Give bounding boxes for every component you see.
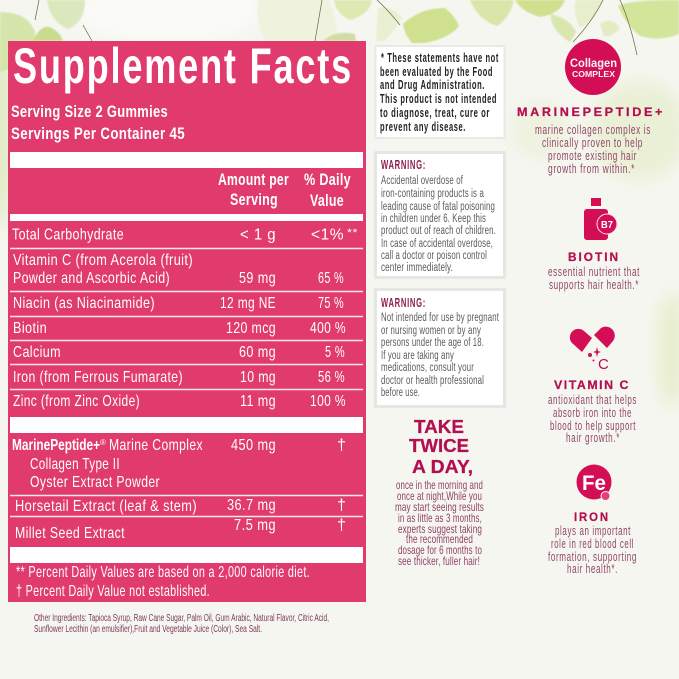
row: total carbohydrate: ** xyxy=(347,227,358,239)
column headers: Amount per xyxy=(218,171,289,189)
row: calcium xyxy=(13,344,345,361)
other ingredients: Other Ingredients: Tapioca Syrup, Raw Cane Sugar, Palm Oil, Gum Arabic, Natural Flavor, Citric Acid, xyxy=(34,613,329,624)
row: zinc xyxy=(13,393,346,410)
row: vitamin c: 59 mg xyxy=(239,270,276,287)
benefit: iron: plays an important xyxy=(555,523,631,538)
row: iron: 10 mg xyxy=(240,369,276,386)
benefit: vitamin c: VITAMIN C xyxy=(554,378,630,392)
icon: collagen complex badge xyxy=(565,39,621,95)
icon: collagen complex badge: Collagen xyxy=(570,58,617,70)
panel: supplement facts xyxy=(8,38,366,602)
heading: take twice a day: TWICE xyxy=(409,436,469,456)
row: calcium: 5 % xyxy=(325,344,345,361)
footnotes: † Percent Daily Value not established. xyxy=(16,583,210,600)
panel: warning overdose: leading cause of fatal poisoning xyxy=(381,201,495,213)
panel: warning pregnancy: or nursing women or by any xyxy=(381,325,481,337)
text: dosage advice: may start seeing results xyxy=(395,500,484,514)
row: total carbohydrate: <1% xyxy=(311,226,344,244)
serving info: Serving Size 2 Gummies xyxy=(11,103,168,121)
panel: warning pregnancy: persons under the age of 18. xyxy=(381,337,484,349)
panel: fda disclaimer: prevent any disease. xyxy=(380,120,466,134)
row: niacin: 12 mg NE xyxy=(220,295,276,312)
serving info: Servings Per Container 45 xyxy=(11,125,185,143)
icon: iron xyxy=(576,464,612,500)
panel: fda disclaimer: to diagnose, treat, cure or xyxy=(380,106,490,120)
benefit: marinepeptide: growth from within.* xyxy=(548,161,635,176)
text: dosage advice: see thicker, fuller hair! xyxy=(398,554,480,568)
row: marinepeptide: † xyxy=(337,437,346,454)
text: dosage advice: the recommended xyxy=(406,532,473,546)
row: iron: 56 % xyxy=(318,369,345,386)
text: dosage advice: in as little as 3 months, xyxy=(398,511,482,525)
panel: warning overdose: call a doctor or poison control xyxy=(381,250,487,262)
row: niacin xyxy=(13,295,344,312)
panel: warning overdose: iron-containing products is a xyxy=(381,188,484,200)
row: calcium: Calcium xyxy=(13,344,61,361)
panel: warning pregnancy: If you are taking any xyxy=(381,350,454,362)
benefit: marinepeptide: MARINEPEPTIDE+ xyxy=(517,105,665,119)
row: vitamin c: Vitamin C (from Acerola (fruit) xyxy=(13,252,193,269)
column headers: Value xyxy=(310,192,344,210)
panel: fda disclaimer: been evaluated by the Food xyxy=(380,65,493,79)
panel: warning overdose: WARNING: xyxy=(381,157,426,172)
text: dosage advice: experts suggest taking xyxy=(398,522,482,536)
row: horsetail: † xyxy=(337,497,346,514)
panel: fda disclaimer: This product is not intended xyxy=(380,92,497,106)
row: horsetail xyxy=(15,497,346,515)
icon: biotin bottle: B7 xyxy=(601,220,613,231)
benefit: biotin: BIOTIN xyxy=(568,250,620,264)
row: vitamin c: Powder and Ascorbic Acid) xyxy=(13,270,170,287)
row: horsetail: Horsetail Extract (leaf & stem) xyxy=(15,498,197,515)
title: Supplement Facts xyxy=(13,38,353,94)
row: total carbohydrate xyxy=(12,226,358,244)
row: niacin: Niacin (as Niacinamide) xyxy=(13,295,155,312)
panel: fda disclaimer xyxy=(376,46,504,138)
row: biotin: 400 % xyxy=(310,320,346,337)
benefit: biotin xyxy=(548,250,640,292)
row: millet xyxy=(15,517,346,542)
heading: take twice a day: TAKE xyxy=(414,417,464,437)
row: vitamin c: 65 % xyxy=(318,270,344,287)
panel: warning pregnancy: Not intended for use by pregnant xyxy=(381,312,499,324)
panel: warning pregnancy xyxy=(376,290,504,406)
row: iron xyxy=(13,369,345,386)
icon: vitamin c capsule: C xyxy=(598,356,609,373)
row: biotin xyxy=(13,320,346,337)
benefit: vitamin c xyxy=(548,378,637,445)
row: total carbohydrate: Total Carbohydrate xyxy=(12,226,124,244)
icon: collagen complex badge: COMPLEX xyxy=(572,69,615,79)
panel: warning overdose: In case of accidental overdose, xyxy=(381,238,493,250)
text: dosage advice: once in the morning and xyxy=(396,478,483,492)
benefit: marinepeptide xyxy=(517,105,665,176)
benefit: vitamin c: hair growth.* xyxy=(566,430,620,445)
column headers xyxy=(218,171,351,210)
row: vitamin c xyxy=(13,252,344,287)
row: marinepeptide: ® xyxy=(100,438,106,447)
row: biotin: Biotin xyxy=(13,320,47,337)
text: dosage advice xyxy=(395,478,484,568)
row: horsetail: 36.7 mg xyxy=(227,497,276,514)
heading: take twice a day: A DAY, xyxy=(412,457,473,477)
row: millet: † xyxy=(337,517,346,534)
icon: iron: Fe xyxy=(582,472,606,495)
row: biotin: 120 mcg xyxy=(226,320,276,337)
panel: warning overdose: in children under 6. Keep this xyxy=(381,213,486,225)
row: marinepeptide: Marine Complex xyxy=(109,437,203,454)
footnotes: ** Percent Daily Values are based on a 2,000 calorie diet. xyxy=(16,564,310,581)
row: niacin: 75 % xyxy=(318,295,344,312)
text: dosage advice: once at night,While you xyxy=(397,489,482,503)
row: marinepeptide: MarinePeptide+ xyxy=(12,437,100,454)
other ingredients xyxy=(34,613,329,635)
serving info xyxy=(11,103,185,143)
row: millet: Millet Seed Extract xyxy=(15,525,125,542)
row: zinc: Zinc (from Zinc Oxide) xyxy=(13,393,140,410)
panel: warning pregnancy: doctor or health professional xyxy=(381,375,484,387)
text: dosage advice: dosage for 6 months to xyxy=(398,543,482,557)
other ingredients: Sunflower Lecithin (an emulsifier),Fruit and Vegetable Juice (Color), Sea Salt. xyxy=(34,624,262,635)
row: zinc: 100 % xyxy=(310,393,346,410)
column headers: % Daily xyxy=(304,171,351,189)
panel: warning pregnancy: before use. xyxy=(381,387,420,399)
panel: fda disclaimer: and Drug Administration. xyxy=(380,78,485,92)
row: iron: Iron (from Ferrous Fumarate) xyxy=(13,369,183,386)
row: marinepeptide: 450 mg xyxy=(231,437,276,454)
panel: warning overdose xyxy=(376,152,504,278)
row: calcium: 60 mg xyxy=(239,344,276,361)
panel: fda disclaimer: * These statements have not xyxy=(381,51,499,65)
row: marinepeptide: Collagen Type II xyxy=(30,456,120,473)
row: millet: 7.5 mg xyxy=(234,517,276,534)
benefit: iron: hair health*. xyxy=(567,561,618,576)
panel: warning overdose: center immediately. xyxy=(381,262,453,274)
icon: biotin bottle xyxy=(584,198,617,240)
benefit: iron xyxy=(548,510,637,576)
benefit: iron: IRON xyxy=(574,510,610,524)
row: zinc: 11 mg xyxy=(240,393,276,410)
panel: warning pregnancy: medications, consult your xyxy=(381,362,474,374)
panel: warning pregnancy: WARNING: xyxy=(381,295,426,310)
row: total carbohydrate: < 1 g xyxy=(240,226,276,244)
row: marinepeptide: Oyster Extract Powder xyxy=(30,474,160,491)
panel: warning overdose: product out of reach of children. xyxy=(381,225,496,237)
footnotes xyxy=(16,564,310,600)
panel: warning overdose: Accidental overdose of xyxy=(381,175,463,187)
row: marinepeptide xyxy=(12,437,346,491)
icon: vitamin c capsule xyxy=(570,327,615,373)
column headers: Serving xyxy=(230,191,278,209)
heading: take twice a day xyxy=(409,417,473,477)
